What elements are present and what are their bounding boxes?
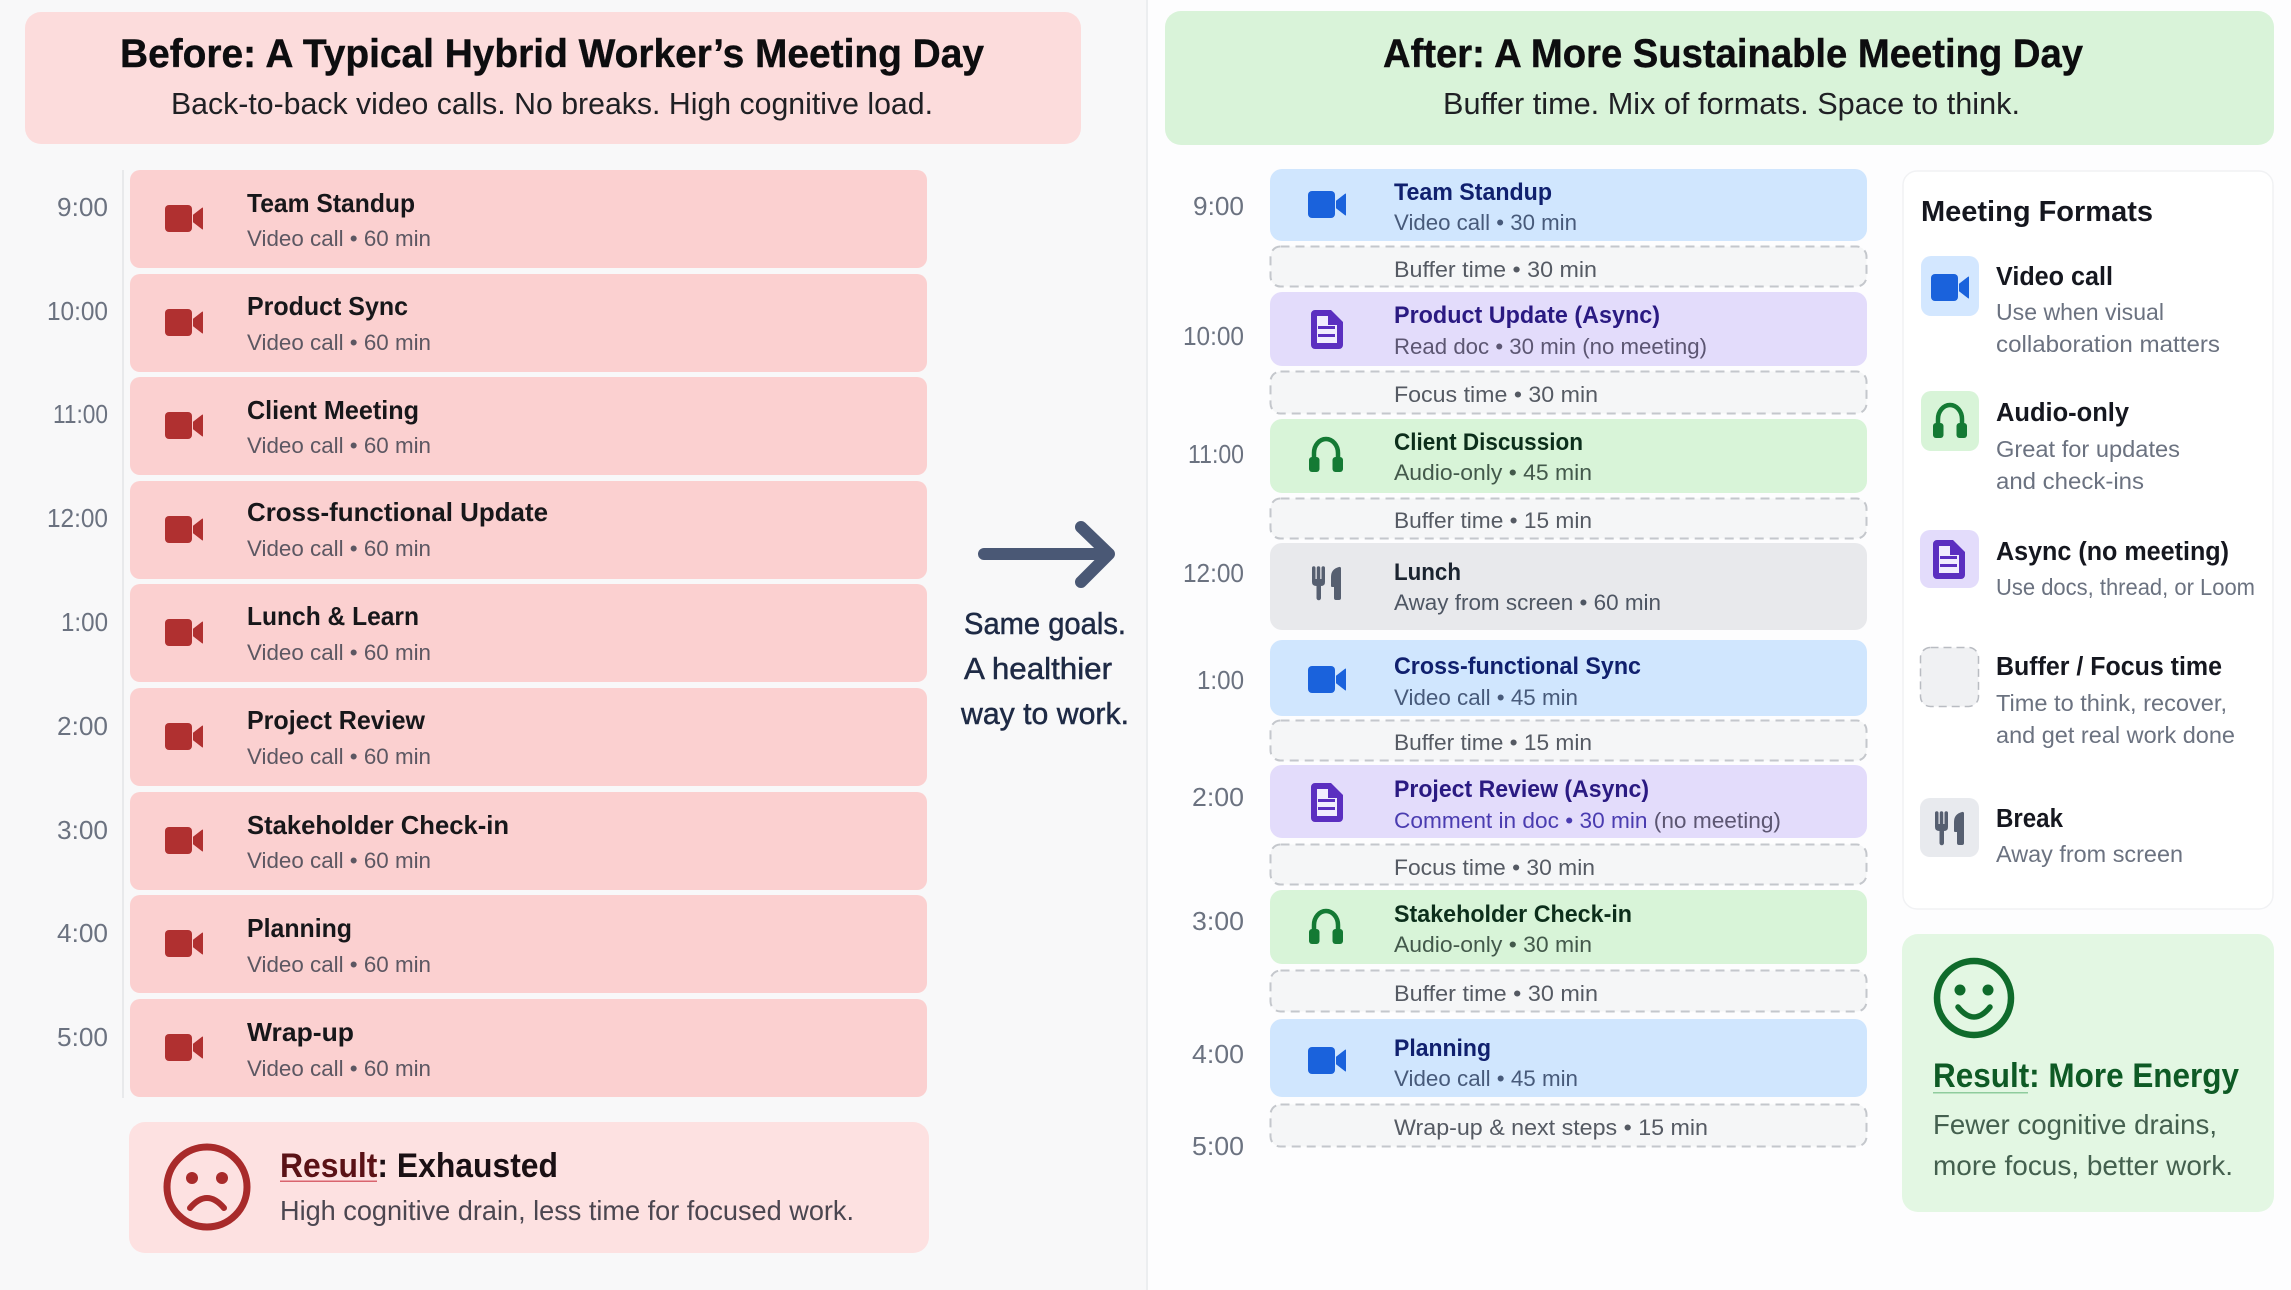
row: 9:00 Team Standup: 9:00 [57,192,108,222]
time labels: 11:00 [1188,439,1244,469]
time labels: 3:00 [1192,906,1244,936]
block: buffer 15 min [1270,498,1866,538]
legend item: video call [1921,256,2220,357]
row: 3:00 Stakeholder Check-in [57,792,927,890]
legend heading: Meeting Formats [1921,196,2153,228]
block: Team Standup: Team Standup [1394,179,1552,206]
result heading: Result: Exhausted [280,1147,558,1185]
legend item: async: Async (no meeting) [1996,538,2229,566]
block: buffer 30 min [1270,246,1866,286]
time labels: 4:00 [1192,1039,1244,1069]
row: 5:00 Wrap-up: Video call • 60 min [247,1056,431,1081]
block: focus 30 min second [1270,844,1866,884]
row: 4:00 Planning: 4:00 [57,918,108,948]
row: 3:00 Stakeholder Check-in: Stakeholder Check-in [247,810,509,840]
icon: smiling face [1937,961,2011,1035]
result description: Fewer cognitive drains, [1933,1109,2217,1140]
block: Planning: Planning [1394,1035,1491,1062]
text: transition message: way to work. [960,696,1129,731]
row: 2:00 Project Review: 2:00 [57,711,108,741]
after title: After: A More Sustainable Meeting Day [1383,32,2084,76]
block: Cross-functional Sync: Video call • 45 min [1394,685,1578,710]
block: Client Discussion [1270,419,1867,493]
row: 12:00 Cross-functional Update [47,481,927,579]
block: wrap-up and next steps: Wrap-up & next steps • 15 min [1394,1115,1708,1140]
row: 11:00 Client Meeting: 11:00 [53,399,108,429]
panel: before header [25,12,1081,144]
row: 1:00 Lunch and Learn [61,584,927,682]
block: Lunch: Lunch [1394,559,1461,586]
result description: High cognitive drain, less time for focused work. [280,1195,854,1226]
block: Project Review async: Project Review (Async) [1394,776,1649,803]
block: buffer 30 min: Buffer time • 30 min [1394,257,1597,282]
block: Cross-functional Sync [1270,640,1867,716]
block: buffer 15 min: Buffer time • 15 min [1394,508,1592,533]
row: 2:00 Project Review [57,688,927,786]
block: Planning [1270,1019,1867,1097]
row: 5:00 Wrap-up [57,999,927,1097]
row: 5:00 Wrap-up: 5:00 [57,1022,108,1052]
legend item: break [1920,798,2183,867]
row: 9:00 Team Standup: Team Standup [247,188,415,218]
row: 9:00 Team Standup [57,170,927,268]
block: buffer 15 min second: Buffer time • 15 min [1394,730,1592,755]
block: buffer 30 min second: Buffer time • 30 min [1394,981,1598,1006]
legend item: break: Break [1996,805,2064,833]
row: 11:00 Client Meeting: Client Meeting [247,395,419,425]
row: 5:00 Wrap-up: Wrap-up [247,1017,354,1047]
time labels: 5:00 [1192,1131,1244,1161]
legend item: break: Away from screen [1996,841,2183,867]
block: focus 30 min second: Focus time • 30 min [1394,855,1595,880]
row: 11:00 Client Meeting: Video call • 60 min [247,433,431,458]
row: 2:00 Project Review: Video call • 60 min [247,744,431,769]
row: 12:00 Cross-functional Update: Cross-functional Update [247,497,548,527]
panel: meeting formats legend [1903,171,2273,909]
row: 12:00 Cross-functional Update: 12:00 [47,503,108,533]
time labels: 10:00 [1183,321,1244,351]
time labels: 1:00 [1197,665,1244,695]
legend item: audio-only: Great for updates [1996,436,2180,462]
row: 11:00 Client Meeting [53,377,927,475]
row: 1:00 Lunch and Learn: Video call • 60 min [247,640,431,665]
block: Client Discussion: Audio-only • 45 min [1394,460,1592,485]
legend item: video call: collaboration matters [1996,331,2220,357]
row: 4:00 Planning: Video call • 60 min [247,952,431,977]
block: Project Review async: Comment in doc • 30 min (no meeting) [1394,808,1781,833]
result description: more focus, better work. [1933,1150,2233,1181]
text: transition message: Same goals. [964,606,1126,641]
arrow: before to after [984,527,1109,582]
block: Product Update async: Read doc • 30 min (no meeting) [1394,334,1707,359]
time labels: 9:00 [1193,191,1244,221]
row: 2:00 Project Review: Project Review [247,705,426,735]
block: Planning: Video call • 45 min [1394,1066,1578,1091]
block: Product Update async [1270,292,1867,366]
row: 10:00 Product Sync: Video call • 60 min [247,330,431,355]
legend item: buffer or focus time: Time to think, recover, [1996,690,2227,716]
block: Cross-functional Sync: Cross-functional Sync [1394,653,1641,680]
legend item: audio-only [1921,391,2180,494]
row: 4:00 Planning: Planning [247,913,352,943]
row: 10:00 Product Sync: 10:00 [47,296,108,326]
block: buffer 30 min second [1270,970,1866,1012]
text: transition message: A healthier [964,651,1112,686]
before subtitle: Back-to-back video calls. No breaks. High cognitive load. [171,86,933,121]
block: Stakeholder Check-in: Stakeholder Check-in [1394,901,1632,928]
block: Stakeholder Check-in: Audio-only • 30 min [1394,932,1592,957]
after subtitle: Buffer time. Mix of formats. Space to think. [1443,86,2020,121]
legend item: audio-only: Audio-only [1996,399,2130,427]
row: 1:00 Lunch and Learn: 1:00 [61,607,108,637]
time labels: 2:00 [1192,782,1244,812]
panel: after header [1165,11,2274,145]
callout: result more energy [1902,934,2274,1212]
panel: before schedule [47,170,927,1097]
row: 3:00 Stakeholder Check-in: 3:00 [57,815,108,845]
block: Lunch [1270,543,1867,630]
row: 1:00 Lunch and Learn: Lunch & Learn [247,601,419,631]
block: Team Standup [1270,169,1867,241]
block: buffer 15 min second [1270,720,1866,760]
block: Lunch: Away from screen • 60 min [1394,590,1661,615]
result description [1933,1109,2233,1181]
row: 9:00 Team Standup: Video call • 60 min [247,226,431,251]
block: focus 30 min [1270,372,1866,414]
legend item: buffer or focus time: and get real work done [1996,722,2235,748]
block: wrap-up and next steps [1270,1104,1866,1146]
block: Project Review async [1270,765,1867,838]
legend item: buffer or focus time: Buffer / Focus time [1996,653,2222,681]
block: Stakeholder Check-in [1270,890,1867,964]
row: 10:00 Product Sync [47,274,927,372]
callout: result exhausted [129,1122,929,1253]
row: 12:00 Cross-functional Update: Video call • 60 min [247,536,431,561]
panel: after schedule [1183,169,1867,1161]
block: Team Standup: Video call • 30 min [1394,210,1577,235]
time labels [1183,191,1244,1161]
row: 3:00 Stakeholder Check-in: Video call • 60 min [247,848,431,873]
legend item: buffer or focus time [1920,648,2235,748]
result heading: Result: More Energy [1933,1057,2239,1095]
legend item: audio-only: and check-ins [1996,468,2144,494]
row: 4:00 Planning [57,895,927,993]
block: Client Discussion: Client Discussion [1394,429,1583,456]
icon: sad face [167,1147,247,1227]
legend item: video call: Video call [1996,263,2113,291]
block: Product Update async: Product Update (Async) [1394,302,1660,329]
legend item: async [1920,530,2255,600]
time labels: 12:00 [1183,558,1244,588]
legend item: async: Use docs, thread, or Loom [1996,574,2255,600]
before title: Before: A Typical Hybrid Worker’s Meeting Day [120,32,985,76]
text: transition message [960,606,1129,731]
block: focus 30 min: Focus time • 30 min [1394,382,1598,407]
row: 10:00 Product Sync: Product Sync [247,291,408,321]
legend item: video call: Use when visual [1996,299,2164,325]
